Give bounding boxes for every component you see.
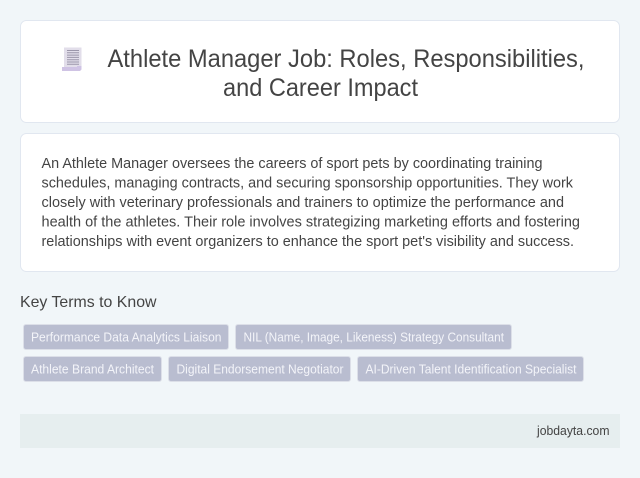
tag list (24, 324, 584, 382)
panel: description (20, 134, 620, 272)
tag: AI-driven talent identification specialist: AI-Driven Talent Identification Specialist (366, 362, 577, 376)
tag: NIL strategy consultant (236, 324, 512, 350)
icon: document scroll (62, 48, 82, 71)
footer credit: jobdayta.com (536, 424, 610, 438)
description text: health of the athletes. Their role involves strategizing marketing efforts and fostering (42, 214, 580, 230)
tag: digital endorsement negotiator: Digital Endorsement Negotiator (176, 362, 344, 376)
tag: performance data analytics liaison (24, 324, 228, 350)
title: Athlete Manager Job: Roles, Responsibilities, (108, 45, 584, 73)
tag: AI-driven talent identification specialist (358, 356, 584, 382)
description text (42, 155, 580, 250)
panel: header (20, 20, 620, 122)
tag: athlete brand architect: Athlete Brand Architect (31, 362, 155, 376)
description text: relationships with event organizers to enhance the sport pet's visibility and success. (42, 233, 574, 250)
title: and Career Impact (223, 74, 418, 102)
tag: athlete brand architect (24, 356, 162, 382)
tag: performance data analytics liaison: Performance Data Analytics Liaison (31, 330, 222, 344)
tag: digital endorsement negotiator (168, 356, 350, 382)
tag: NIL strategy consultant: NIL (Name, Image, Likeness) Strategy Consultant (244, 330, 504, 344)
description text: schedules, managing contracts, and securing sponsorship opportunities. They work (42, 174, 573, 192)
footer (20, 414, 620, 448)
description text: closely with veterinary professionals and trainers to optimize the performance and (42, 194, 564, 211)
heading: key terms: Key Terms to Know (20, 294, 157, 311)
title (108, 45, 584, 102)
description text: An Athlete Manager oversees the careers of sport pets by coordinating training (42, 155, 542, 172)
